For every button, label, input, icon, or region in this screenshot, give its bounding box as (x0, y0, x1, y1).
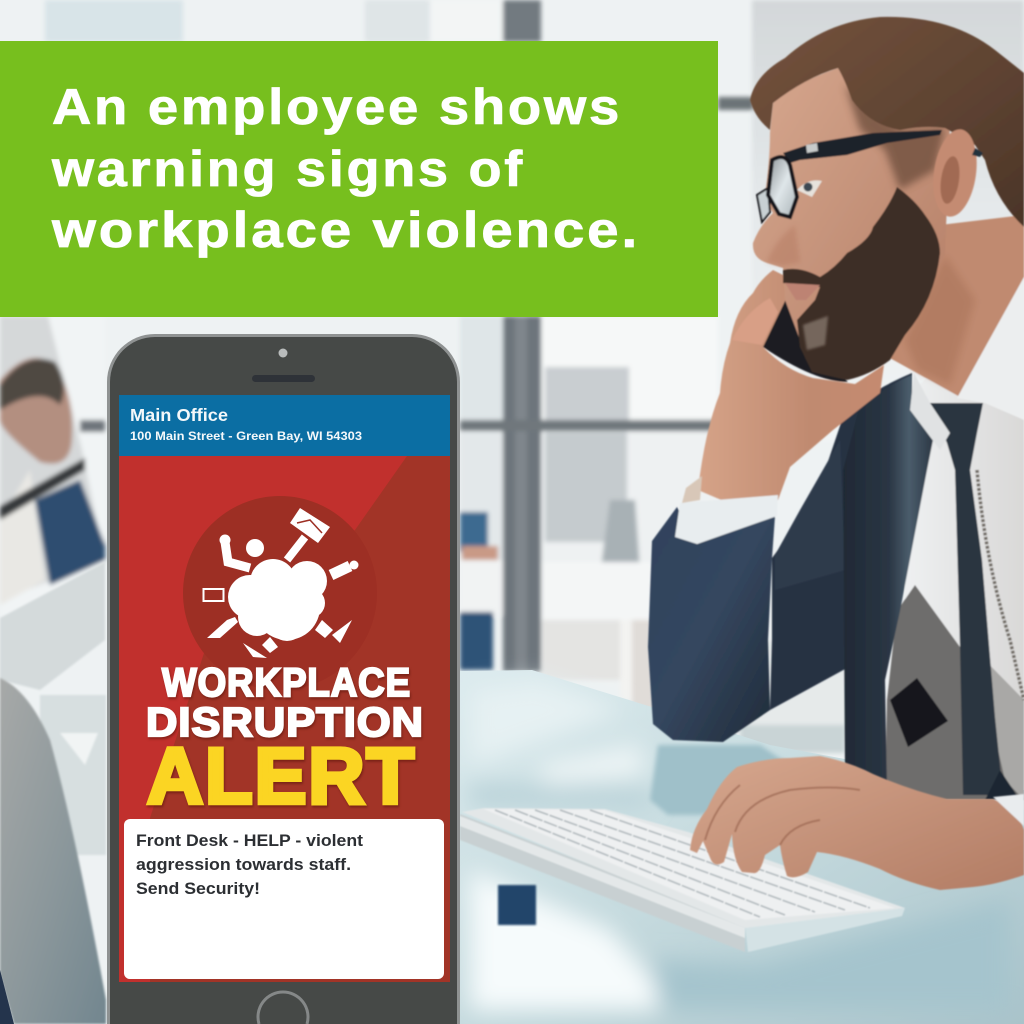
title: warning signs of (51, 141, 525, 197)
lips (785, 283, 820, 300)
collar right (957, 277, 1024, 420)
panel: blue location header (119, 395, 450, 456)
icon: disruption circle with scuffle (183, 496, 377, 690)
icon: speaker slot (252, 375, 315, 382)
panel: blue location header: 100 Main Street - Green Bay, WI 54303 (130, 429, 362, 443)
nose shade (767, 225, 800, 266)
icon: home button (258, 992, 308, 1024)
sleeve reflection on desk (650, 745, 835, 815)
neck shadow (905, 255, 975, 385)
inner cuff (682, 476, 702, 503)
ear (928, 127, 982, 219)
icon: camera dot (278, 348, 288, 358)
jacket upper arm and shoulder (770, 373, 912, 710)
lining pocket (890, 678, 948, 747)
panel: red alert screen (119, 456, 450, 982)
phone mockup (107, 334, 460, 1024)
title: An employee shows (52, 79, 622, 135)
eye (797, 180, 822, 197)
heading: ALERT: ALERT (147, 731, 416, 820)
jacket lapel (843, 375, 935, 790)
beard (783, 187, 940, 380)
panel: green headline banner (0, 41, 718, 317)
panel: white message box: aggression towards staff. (136, 855, 351, 874)
collar left (910, 373, 950, 450)
shirt torso (905, 277, 1024, 810)
shirt cuff (675, 495, 778, 544)
heading: DISRUPTION: DISRUPTION (146, 699, 424, 745)
desk surface (460, 670, 1024, 1024)
panel: white message box: Send Security! (136, 879, 260, 898)
glasses (757, 130, 983, 222)
shirt lower shade (975, 650, 1024, 800)
eye pupil (804, 182, 812, 192)
keyboard (460, 808, 905, 952)
neck (888, 215, 1024, 397)
panel: white message box: Front Desk - HELP - violent (136, 831, 363, 850)
panel: white message box (124, 819, 444, 979)
tie (930, 403, 1003, 795)
title: workplace violence. (51, 202, 640, 258)
panel: blue location header: Main Office (130, 405, 228, 425)
forearm sleeve (648, 507, 775, 742)
man on phone (648, 17, 1024, 810)
temple hair fade (845, 85, 945, 190)
chin grey patch (803, 316, 828, 350)
blurred left colleague and desk objects (0, 316, 106, 1024)
jacket lining (885, 585, 1024, 800)
heading: WORKPLACE: WORKPLACE (162, 661, 411, 705)
title (51, 79, 640, 258)
raised hand and forearm (698, 270, 884, 508)
laptop edge foreground (0, 678, 106, 1024)
typing hand (690, 756, 1024, 890)
leg seen through desk (498, 885, 536, 925)
lanyard (977, 470, 1024, 700)
shirt cuff at wrist (993, 794, 1024, 826)
phone handset (763, 297, 848, 382)
hair (750, 17, 1024, 227)
face (753, 68, 950, 378)
